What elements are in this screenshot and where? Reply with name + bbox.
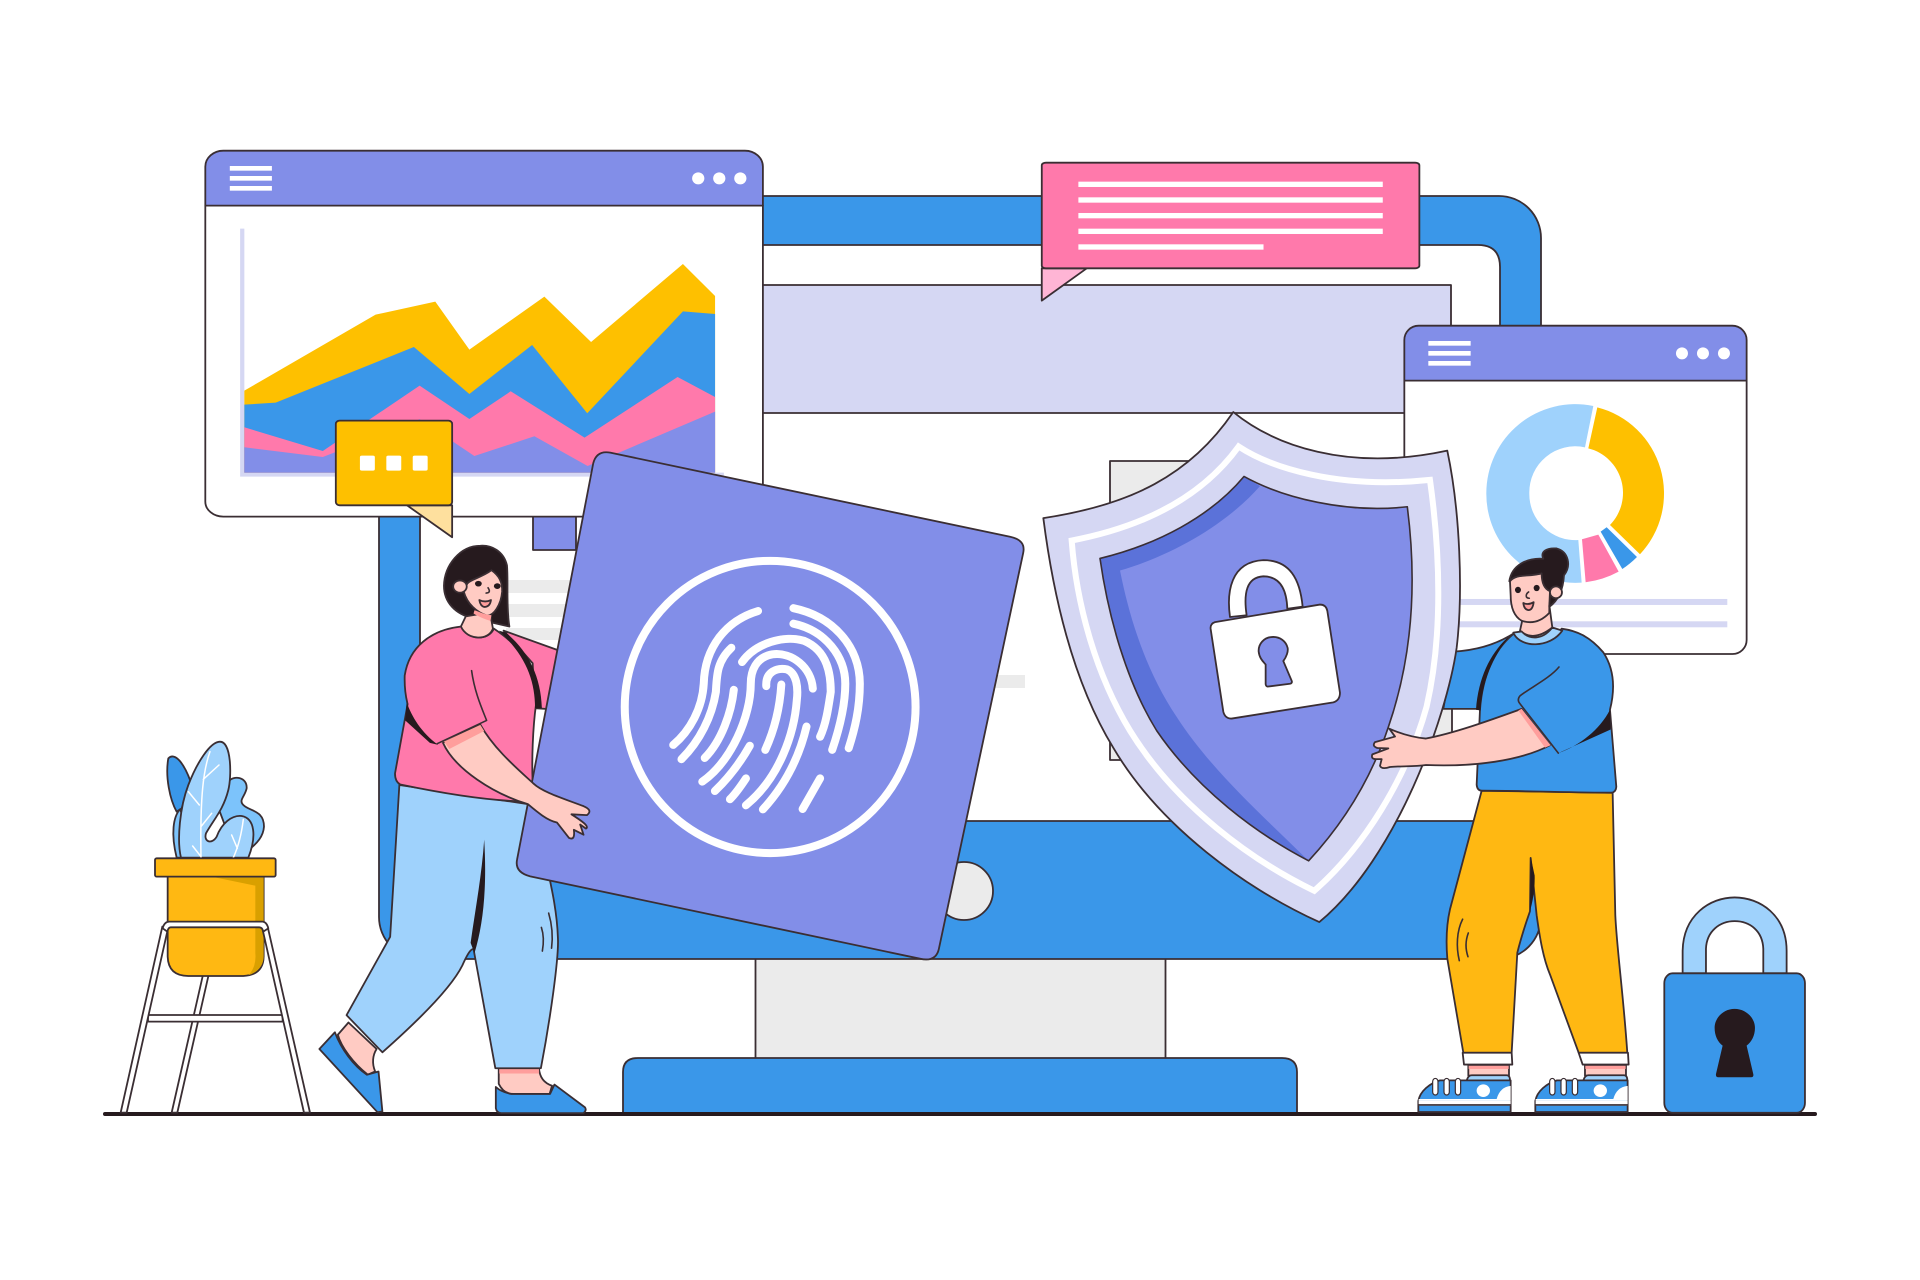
window dots (692, 172, 746, 184)
fingerprint ridges (673, 608, 860, 809)
face (453, 570, 502, 621)
neck (461, 612, 493, 638)
padlock shackle (1683, 897, 1787, 973)
hair (444, 546, 509, 627)
shield (1043, 412, 1460, 922)
head (1509, 548, 1568, 622)
shield white outline (1072, 446, 1438, 891)
window body (1404, 381, 1747, 654)
woman's front arm and hand (443, 725, 589, 839)
pink speech bubble (1042, 163, 1419, 301)
panel: donut chart window (1404, 326, 1747, 654)
collar (1513, 627, 1562, 644)
window dots (1676, 347, 1730, 359)
stool frame (121, 922, 310, 1113)
monitor screen (420, 245, 1500, 821)
sleeve outline (1518, 667, 1559, 753)
window body (205, 206, 763, 517)
monitor (379, 196, 1541, 1113)
monitor stand neck (756, 957, 1166, 1059)
ground line (105, 1112, 1815, 1116)
monitor frame (379, 196, 1541, 959)
monitor stand base (623, 1058, 1297, 1113)
shoes (1418, 1065, 1628, 1112)
back foot (319, 1022, 382, 1112)
donut chart (1486, 404, 1664, 583)
person right: woman in blue shirt, body (1418, 548, 1629, 1112)
shirt (395, 627, 536, 801)
screen grey panel (1110, 461, 1452, 760)
monitor power button (935, 862, 993, 920)
shirt (1477, 629, 1616, 793)
back sleeve (504, 631, 560, 709)
screen small square (533, 505, 576, 550)
menu icon (230, 166, 272, 191)
window header (1404, 326, 1747, 381)
back sleeve (1443, 633, 1515, 709)
screen grey text lines (506, 580, 1025, 688)
yellow speech bubble (336, 421, 452, 537)
panel: area chart window (205, 151, 763, 537)
card panel (517, 452, 1024, 959)
menu icon (1428, 341, 1471, 366)
legend lines (1457, 599, 1727, 627)
shield outer (1043, 412, 1460, 922)
shield inner outline (1100, 476, 1412, 861)
trousers (1447, 791, 1629, 1065)
window header (205, 151, 763, 206)
stool cross bar (148, 1015, 283, 1022)
shield inner (1100, 476, 1412, 861)
arm shadow (444, 725, 484, 749)
front foot (496, 1068, 586, 1113)
neck (1520, 605, 1552, 636)
plant leaves (167, 742, 264, 858)
fingerprint ring (625, 561, 916, 853)
person left: woman in pink shirt (319, 546, 586, 1113)
potted plant on stool (121, 742, 310, 1113)
right woman's arm and hand (1372, 709, 1551, 768)
shield inner shadow (1100, 476, 1309, 861)
trousers (347, 785, 558, 1068)
padlock body (1664, 973, 1805, 1113)
padlock (1664, 897, 1805, 1113)
padlock keyhole (1715, 1009, 1755, 1077)
sleeve fold (437, 671, 487, 744)
fingerprint card (517, 452, 1024, 959)
icon: lock on shield (1211, 560, 1340, 719)
shirt straps (405, 631, 542, 745)
area chart (240, 229, 724, 477)
dark shirt folds (1476, 638, 1611, 753)
arm shadow (1518, 709, 1551, 748)
screen banner (700, 285, 1451, 413)
pot (155, 858, 276, 976)
stool back leg (172, 973, 209, 1113)
